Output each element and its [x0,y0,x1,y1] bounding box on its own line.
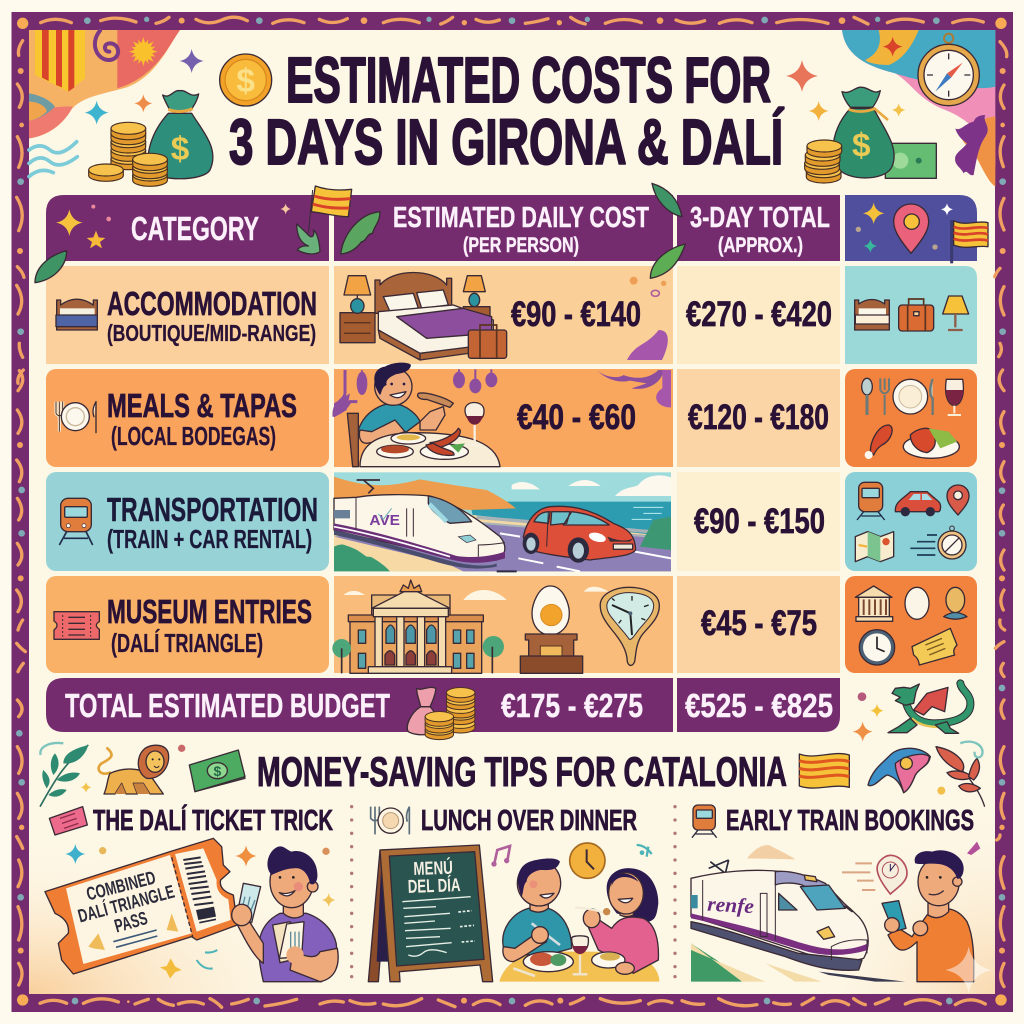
illustration: big combined pass ticket: PASS [112,907,150,937]
text: museum label: (DALÍ TRIANGLE) [111,628,263,658]
divider: dotted line 1 [350,805,353,978]
text: total meals: €120 - €180 [688,398,829,437]
illustration: egg on pedestal and melting clock [520,586,659,673]
icon: money bag, coins and banknote right [786,60,936,183]
illustration: big combined pass ticket [45,838,335,978]
illustration: menu del dia chalkboard: MENÚ [413,857,453,879]
illustration: AVE train and red car on coast [334,472,671,571]
icon: train [692,805,717,838]
table header row: (APPROX.) [718,233,803,257]
panel: cost table [46,195,977,673]
text: accommodation label: ACCOMMODATION [107,285,317,322]
illustration: man holding tickets [232,846,338,982]
illustration: leaf branch and lion [40,743,185,807]
row backgrounds [46,266,977,673]
panel: tip 1, the Dalí ticket trick [45,803,338,982]
header icon cell: star, pin and flag [856,203,988,263]
row 2: meals and tapas [56,363,963,467]
title: 3 DAYS IN GIRONA & DALÍ [229,106,785,178]
title [229,44,785,178]
heading: money-saving tips: MONEY-SAVING TIPS FOR CATALONIA [257,748,787,795]
icon: gold dollar coin: $ [236,63,255,100]
icon: banknote: $ [213,763,221,779]
divider: dotted line 2 [673,805,677,978]
icons: bed, suitcase, lamp [855,296,969,331]
text: museum label [107,593,312,658]
icon: colourful Gaudi motif [868,748,930,793]
top-left corner art: Catalan flag and waves [29,30,204,177]
table header row [46,195,977,261]
icon: train [59,498,93,545]
illustration: man booking with phone [842,842,992,993]
top-right corner art: compass and dragon [842,30,995,187]
illustration: big combined pass ticket: COMBINED [84,867,158,905]
icons: museum, egg, clock, ticket [855,586,967,665]
text: total museums: €45 - €75 [701,604,817,643]
illustration: couple dining with clock [499,843,659,982]
illustration: bedroom [340,272,668,360]
illustration: man eating tapas [334,363,671,467]
illustration: renfe train: renfe [707,894,754,918]
icon: money bag and coin stacks left: $ [171,131,190,168]
row 1: accommodation [56,272,969,360]
total estimated budget bar: TOTAL ESTIMATED BUDGET [65,687,390,724]
illustration: renfe train [691,845,905,982]
illustration: menu del dia chalkboard: DEL DÍA [407,874,461,897]
panel: tip 3, early train bookings [691,805,992,993]
text: meals label [107,387,297,451]
icon: bed [56,299,97,330]
illustration: AVE train and red car on coast: AVE [369,512,400,529]
icon: money bag and coin stacks left [89,91,213,186]
icons: train, car, pin, map, compass [855,482,969,562]
text: accommodation label: (BOUTIQUE/MID-RANGE) [107,320,316,346]
text: meals label: MEALS & TAPAS [107,387,297,424]
panel: tip 2, lunch over dinner [368,805,659,982]
total estimated budget bar: €175 - €275 [501,687,643,724]
title: ESTIMATED COSTS FOR [286,44,771,116]
illustration: dragon [853,683,970,742]
icon: ticket [54,612,99,639]
illustration: big combined pass ticket: DALÍ TRIANGLE [76,881,177,927]
text: total transportation: €90 - €150 [694,502,825,541]
text: daily cost meals: €40 - €60 [517,398,636,437]
icon: fork, plate and knife [371,807,409,834]
text: total accommodation: €270 - €420 [686,295,832,334]
icon: pink bag and coins [407,687,475,740]
tip heading: THE DALÍ TICKET TRICK [93,803,333,837]
tip heading: LUNCH OVER DINNER [421,805,637,837]
total estimated budget bar [46,678,840,740]
table header row: CATEGORY [131,210,259,247]
total estimated budget bar: €525 - €825 [685,687,833,724]
icon: pink ticket [49,807,87,835]
icon: money bag, coins and banknote right: $ [852,128,871,165]
text: transportation label [107,491,318,554]
header decorations: stars, flag and leaves [35,183,685,283]
table header row: 3-DAY TOTAL [690,202,830,234]
icon: gold dollar coin [220,54,272,106]
table header row: (PER PERSON) [463,233,579,257]
icons: cutlery, wine and food [862,378,963,459]
icon: banknote [189,750,245,792]
text: accommodation label [107,285,317,346]
text: transportation label: TRANSPORTATION [107,491,318,528]
text: daily cost accommodation: €90 - €140 [511,295,641,334]
text: transportation label: (TRAIN + CAR RENTAL) [107,524,312,554]
row 4: museum entries [54,580,967,673]
illustration: flag and colourful motif with red leaves [799,742,985,807]
icon: plate and cutlery [56,402,96,433]
icon: red leaf branch [936,742,985,807]
text: meals label: (LOCAL BODEGAS) [111,421,276,451]
row 3: transportation [59,472,969,571]
text: museum label: MUSEUM ENTRIES [107,593,312,630]
table header row: ESTIMATED DAILY COST [393,202,649,234]
illustration: museum [332,580,507,673]
icon: Catalan flag [799,754,849,788]
illustration: menu del dia chalkboard [368,845,510,982]
